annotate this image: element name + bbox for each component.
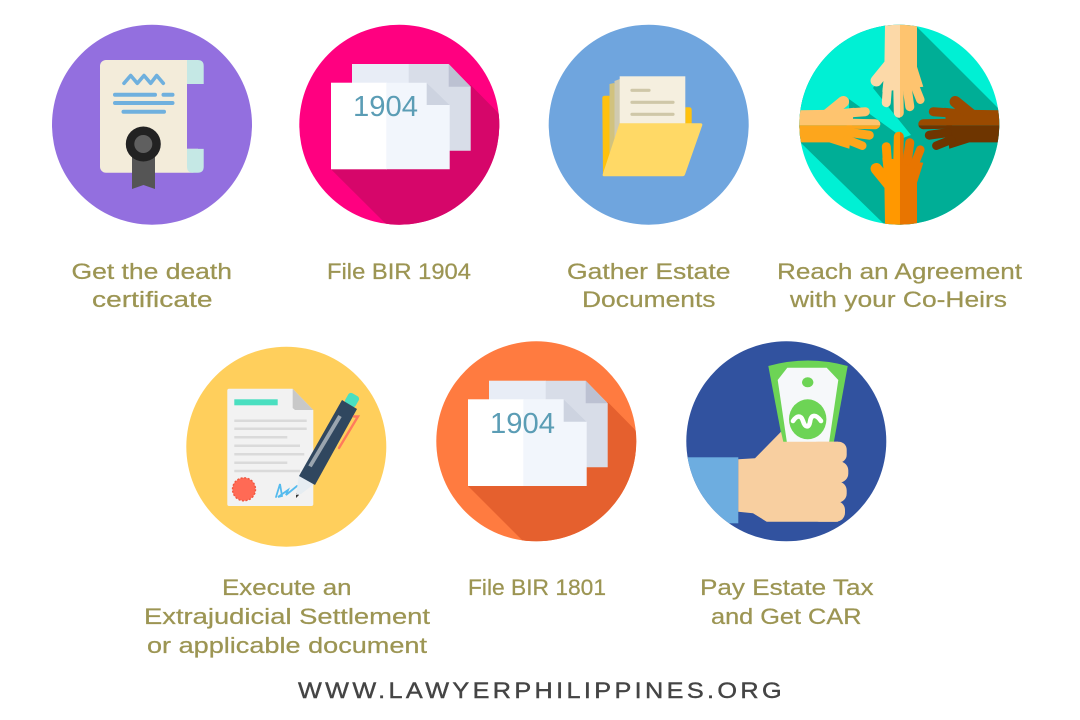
- panel: step 5 extrajudicial settlement: [144, 347, 431, 658]
- label: reach an agreement: Reach an Agreement: [777, 259, 1023, 284]
- long shadow: [331, 85, 500, 225]
- label: file BIR 1904: File BIR 1904: [327, 259, 471, 284]
- icon: form pages: [468, 381, 608, 486]
- panel: step 2 file BIR 1904: [299, 24, 500, 280]
- icon: four hands with shadows: [799, 24, 1000, 225]
- hand: right: [918, 96, 1000, 150]
- label: gather estate documents: Documents: [582, 287, 716, 312]
- label: execute an extrajudicial settlement: Execute an: [222, 575, 352, 600]
- orange circle: [436, 341, 636, 541]
- icon: certificate scroll: [100, 60, 207, 189]
- label: gather estate documents: Gather Estate: [567, 259, 730, 284]
- hand: top: [876, 5, 923, 113]
- panel: step 3 gather estate documents: [549, 25, 749, 312]
- label: execute an extrajudicial settlement: Extrajudicial Settlement: [144, 604, 431, 629]
- label: get the death certificate: [72, 259, 232, 312]
- icon: form pages: 1904: [353, 91, 418, 123]
- panel: step 7 pay estate tax: [670, 341, 886, 629]
- hand: bottom: [876, 137, 923, 245]
- label: pay estate tax: [700, 575, 874, 629]
- navy circle: [686, 341, 886, 541]
- footer website: WWW.LAWYERPHILIPPINES.ORG: [298, 678, 785, 703]
- pink circle: [299, 25, 499, 225]
- label: pay estate tax: and Get CAR: [711, 604, 862, 629]
- purple circle: [52, 25, 252, 225]
- label: gather estate documents: [567, 259, 730, 312]
- panel: step 4 reach an agreement: [779, 24, 1022, 312]
- teal circle: [799, 25, 999, 225]
- icon: hand holding money: [670, 360, 848, 523]
- icon: form pages: [331, 64, 471, 169]
- icon: signed document and pen: [227, 389, 360, 506]
- label: file BIR 1801: File BIR 1801: [468, 575, 606, 600]
- label: reach an agreement: [777, 259, 1023, 312]
- blue circle: [549, 25, 749, 225]
- label: execute an extrajudicial settlement: [144, 575, 431, 658]
- long shadow: [468, 402, 636, 542]
- icon: open folder: [602, 76, 702, 176]
- label: pay estate tax: Pay Estate Tax: [700, 575, 874, 600]
- yellow circle: [186, 347, 386, 547]
- icon: form pages: 1904: [490, 408, 555, 440]
- panel: step 1 death certificate: [52, 25, 252, 312]
- label: reach an agreement: with your Co-Heirs: [789, 287, 1007, 312]
- label: execute an extrajudicial settlement: or applicable document: [147, 633, 428, 658]
- panel: step 6 file BIR 1801: [436, 341, 636, 596]
- hand: left: [799, 96, 880, 150]
- label: get the death certificate: Get the death: [72, 259, 232, 284]
- label: get the death certificate: certificate: [92, 287, 212, 312]
